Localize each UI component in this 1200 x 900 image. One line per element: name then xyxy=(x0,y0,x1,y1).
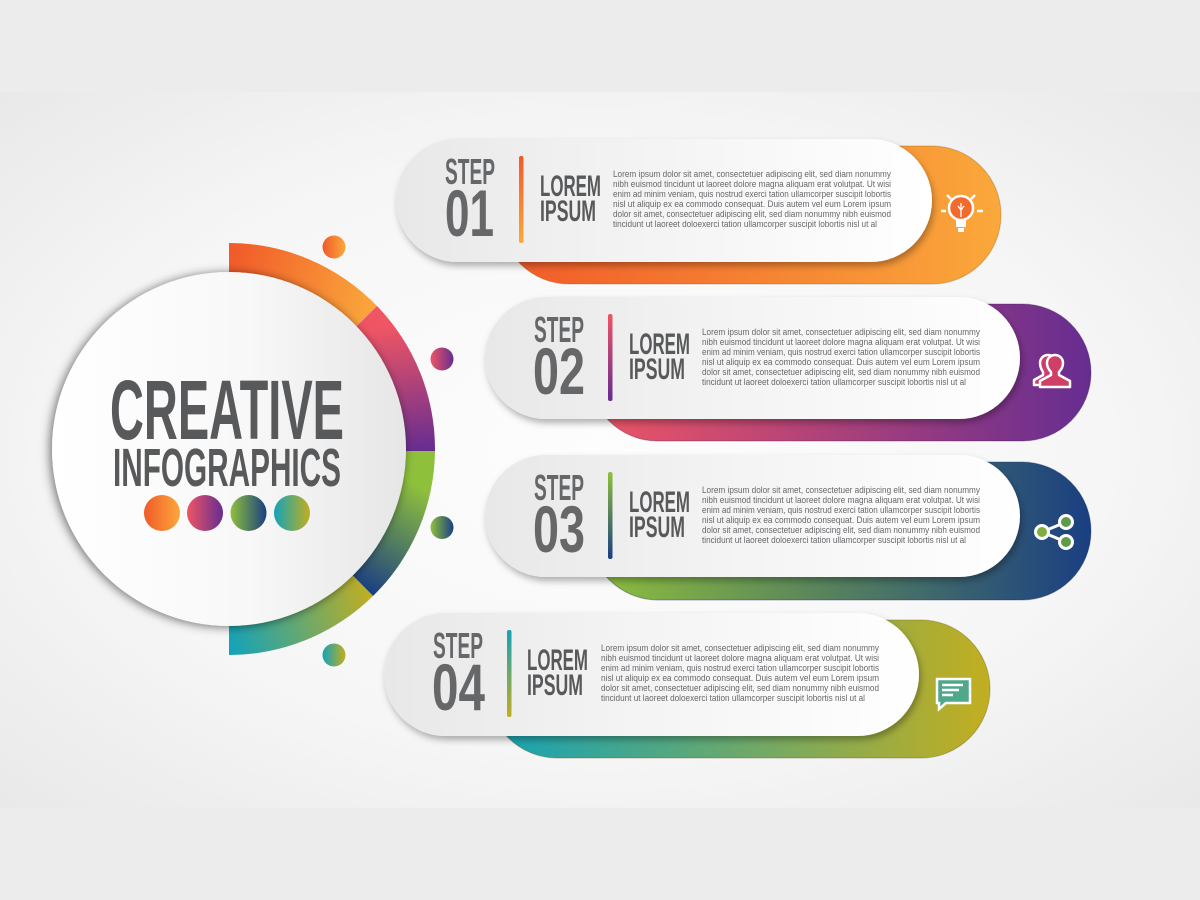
back tab orange xyxy=(500,146,1001,284)
body text: tincidunt ut laoreet doloexerci tation ullamcorper suscipit lobortis nisl ut al xyxy=(702,535,966,545)
body text: nisl ut aliquip ex ea commodo consequat. Duis autem vel eum Lorem ipsum xyxy=(601,673,879,683)
heading: IPSUM xyxy=(629,511,685,544)
heading xyxy=(629,328,690,386)
body text: enim ad minim veniam, quis nostrud exerci tation ullamcorper suscipit lobortis xyxy=(702,347,981,357)
heading: LOREM xyxy=(629,328,690,361)
ring marker dots xyxy=(322,236,454,666)
body text: enim ad minim veniam, quis nostrud exerci tation ullamcorper suscipit lobortis xyxy=(613,189,892,199)
body text: tincidunt ut laoreet doloexerci tation ullamcorper suscipit lobortis nisl ut al xyxy=(702,377,966,387)
divider bar xyxy=(519,156,524,243)
step number: 04 xyxy=(432,650,485,724)
heading: IPSUM xyxy=(540,195,596,228)
heading: LOREM xyxy=(527,644,588,677)
body text: tincidunt ut laoreet doloexerci tation ullamcorper suscipit lobortis nisl ut al xyxy=(601,693,865,703)
panel: step 03 xyxy=(485,455,1091,600)
heading xyxy=(527,644,588,702)
step number: 02 xyxy=(533,334,585,408)
step label: STEP xyxy=(534,467,584,508)
heading: IPSUM xyxy=(527,669,583,702)
back tab teal olive xyxy=(488,620,990,758)
subtitle: infographics: INFOGRAPHICS xyxy=(113,438,341,498)
icon: share xyxy=(1036,516,1072,548)
body text: nisl ut aliquip ex ea commodo consequat. Duis autem vel eum Lorem ipsum xyxy=(702,515,980,525)
icon: light bulb xyxy=(941,195,983,232)
body text: nisl ut aliquip ex ea commodo consequat. Duis autem vel eum Lorem ipsum xyxy=(613,199,891,209)
divider bar xyxy=(507,630,512,717)
body text: Lorem ipsum dolor sit amet, consectetuer adipiscing elit, sed diam nonummy xyxy=(613,169,892,179)
body text: nibh euismod tincidunt ut laoreet dolore magna aliquam erat volutpat. Ut wisi xyxy=(702,495,980,505)
panel: step 04 xyxy=(384,613,990,758)
body text: enim ad minim veniam, quis nostrud exerci tation ullamcorper suscipit lobortis xyxy=(702,505,981,515)
icon: chat bubble xyxy=(937,679,970,709)
body text: dolor sit amet, consectetuer adipiscing elit, sed diam nonummy nibh euismod xyxy=(702,525,980,535)
colour dots row xyxy=(144,495,310,531)
body text: tincidunt ut laoreet doloexerci tation ullamcorper suscipit lobortis nisl ut al xyxy=(613,219,877,229)
segmented colour ring xyxy=(229,243,435,655)
body text: nibh euismod tincidunt ut laoreet dolore magna aliquam erat volutpat. Ut wisi xyxy=(613,179,891,189)
divider bar xyxy=(608,472,612,559)
panel: step 02 xyxy=(485,297,1091,441)
heading: LOREM xyxy=(540,170,601,203)
body text: Lorem ipsum dolor sit amet, consectetuer adipiscing elit, sed diam nonummy xyxy=(702,485,981,495)
step label: STEP xyxy=(534,309,584,350)
body text: enim ad minim veniam, quis nostrud exerci tation ullamcorper suscipit lobortis xyxy=(601,663,880,673)
step label: STEP xyxy=(445,151,495,192)
body text: nibh euismod tincidunt ut laoreet dolore magna aliquam erat volutpat. Ut wisi xyxy=(601,653,879,663)
body text: nibh euismod tincidunt ut laoreet dolore magna aliquam erat volutpat. Ut wisi xyxy=(702,337,980,347)
back tab navy xyxy=(589,462,1091,600)
divider bar xyxy=(608,314,612,401)
step number: 01 xyxy=(445,176,494,250)
body text xyxy=(702,485,981,545)
body text xyxy=(601,643,880,703)
body text: Lorem ipsum dolor sit amet, consectetuer adipiscing elit, sed diam nonummy xyxy=(601,643,880,653)
step label: STEP xyxy=(433,625,483,666)
white pill xyxy=(485,297,1020,419)
white pill xyxy=(396,139,932,262)
body text: dolor sit amet, consectetuer adipiscing elit, sed diam nonummy nibh euismod xyxy=(601,683,879,693)
title: creative: CREATIVE xyxy=(110,363,344,457)
panel: step 01 xyxy=(396,139,1001,284)
body text xyxy=(613,169,892,229)
back tab purple xyxy=(589,304,1091,441)
white pill xyxy=(485,455,1020,577)
white pill xyxy=(384,613,919,736)
heading: LOREM xyxy=(629,486,690,519)
heading xyxy=(629,486,690,544)
icon: users xyxy=(1034,355,1070,387)
step number: 03 xyxy=(533,492,585,566)
body text: dolor sit amet, consectetuer adipiscing elit, sed diam nonummy nibh euismod xyxy=(702,367,980,377)
body text xyxy=(702,327,981,387)
body text: nisl ut aliquip ex ea commodo consequat. Duis autem vel eum Lorem ipsum xyxy=(702,357,980,367)
heading: IPSUM xyxy=(629,353,685,386)
body text: Lorem ipsum dolor sit amet, consectetuer adipiscing elit, sed diam nonummy xyxy=(702,327,981,337)
heading xyxy=(540,170,601,228)
central disc xyxy=(52,272,406,626)
body text: dolor sit amet, consectetuer adipiscing elit, sed diam nonummy nibh euismod xyxy=(613,209,891,219)
